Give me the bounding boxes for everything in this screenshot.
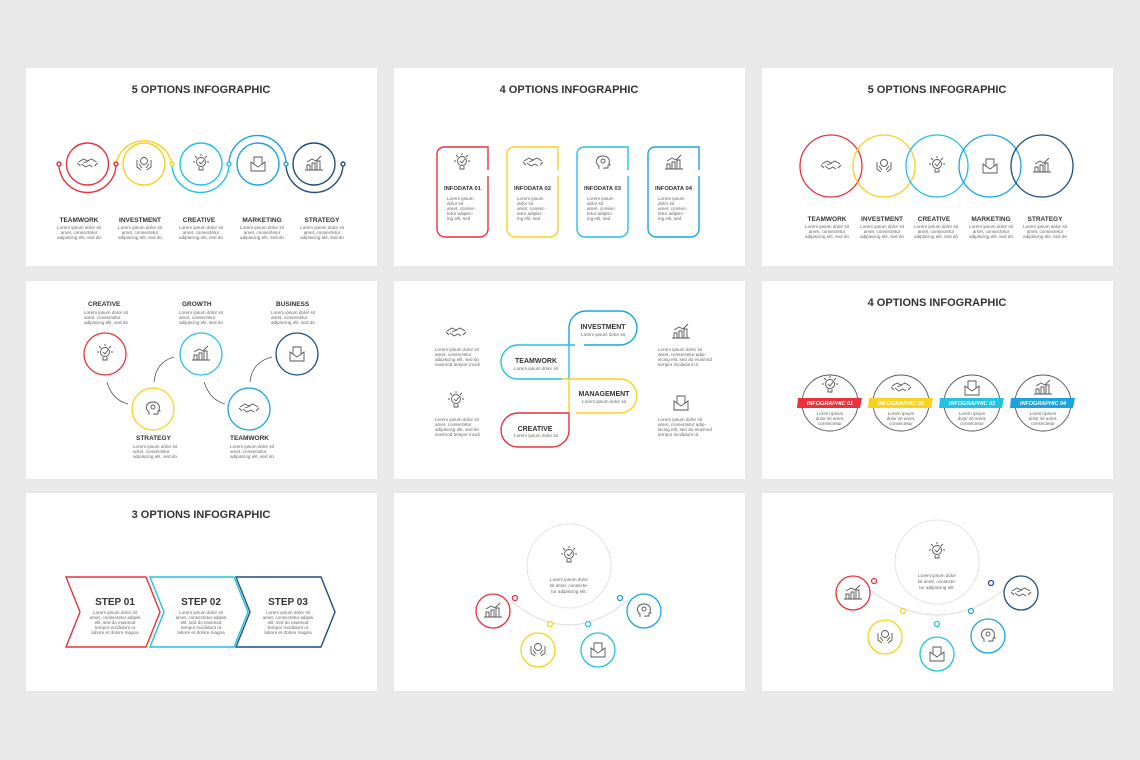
panel: snake pills: Lorem ipsum dolor sit — [435, 417, 480, 422]
panel: snake pills: iscing elit, sed do eiusmod — [658, 357, 712, 362]
labels: Lorem ipsum dolor sit — [240, 225, 285, 230]
panel: 5 options overlapping circles: amet, consectetur — [809, 229, 846, 234]
panel: 4 options banners: Lorem ipsum — [959, 411, 985, 416]
panel: snake pills: Lorem ipsum dolor sit — [514, 433, 559, 438]
panel: 5 options overlapping circles: adipiscing elit, sed do — [860, 234, 904, 239]
panel: 3 step chevrons: Lorem ipsum dolor sit — [266, 610, 311, 615]
panel: 4 options tabs: tetur adipisc- — [658, 211, 685, 216]
panel: 4 options tabs: ing elit, sed — [587, 216, 611, 221]
panel: 4 options tabs: tetur adipisc- — [517, 211, 544, 216]
panel: hub with 4 bubbles: tur adipiscing elit. — [551, 589, 587, 594]
panel: 5 options overlapping circles: amet, consectetur — [973, 229, 1010, 234]
panel: 4 options tabs: ing elit, sed — [658, 216, 682, 221]
labels: STRATEGY — [305, 217, 340, 224]
panel: snake pills: Lorem ipsum dolor sit — [582, 399, 627, 404]
panel: 5 options overlapping circles — [762, 68, 1113, 266]
panel: snake pills: eiusmod tempor incidi — [435, 362, 480, 367]
panel: hub with 5 bubbles: Lorem ipsum dolor — [918, 573, 956, 578]
panel: hub with 5 bubbles: sit amet, consecte- — [918, 579, 957, 584]
panel: 4 options banners: Lorem ipsum — [888, 411, 914, 416]
panel: snake pills: iscing elit, sed do eiusmod — [658, 427, 712, 432]
panel: snake pills: amet, consectetur — [435, 352, 472, 357]
labels: adipiscing elit, sed do — [179, 235, 223, 240]
panel: snake pills: amet, consectetur adip- — [658, 422, 706, 427]
title: 4 OPTIONS INFOGRAPHIC — [500, 84, 638, 96]
panel: 4 options tabs: dolor sit — [587, 201, 604, 206]
panel: zigzag circles: adipiscing elit, sed do — [271, 320, 315, 325]
panel: 4 options tabs: Lorem ipsum — [517, 196, 544, 201]
panel: zigzag circles: GROWTH — [182, 301, 212, 308]
tabs — [437, 147, 699, 237]
panel: zigzag circles: TEAMWORK — [230, 435, 269, 442]
panel: zigzag circles: BUSINESS — [276, 301, 310, 308]
panel: zigzag circles: amet, consectetur — [230, 449, 267, 454]
panel: 3 step chevrons: labore et dolore magna — [177, 630, 225, 635]
panel: 4 options banners: Lorem ipsum — [817, 411, 843, 416]
labels: Lorem ipsum dolor sit — [300, 225, 345, 230]
panel: zigzag circles — [26, 281, 377, 479]
panel: 5 options overlapping circles: Lorem ipsum dolor sit — [860, 224, 905, 229]
panel: zigzag circles: adipiscing elit, sed do — [230, 454, 274, 459]
panel: hub with 4 bubbles — [394, 493, 745, 691]
panel: snake pills: eiusmod tempor incidi — [435, 432, 480, 437]
panel: 4 options tabs: Lorem ipsum — [658, 196, 685, 201]
labels: Lorem ipsum dolor sit — [57, 225, 102, 230]
panel: 3 step chevrons: elit, sed do eiusmod — [268, 620, 309, 625]
panel: 5 options overlapping circles: adipiscing elit, sed do — [969, 234, 1013, 239]
panel: 4 options tabs: Lorem ipsum — [587, 196, 614, 201]
panel: zigzag circles: amet, consectetur — [84, 315, 121, 320]
panel: zigzag circles: amet, consectetur — [271, 315, 308, 320]
panel: snake pills: Lorem ipsum dolor sit — [581, 332, 626, 337]
panel: 3 step chevrons: labore et dolore magna — [91, 630, 139, 635]
panel: 4 options banners: Lorem ipsum — [1030, 411, 1056, 416]
panel: 3 step chevrons: STEP 03 — [268, 597, 308, 608]
labels: amet, consectetur — [244, 230, 281, 235]
panel: 3 step chevrons: STEP 02 — [181, 597, 221, 608]
panel: 3 step chevrons: elit, sed do eiusmod — [181, 620, 222, 625]
labels: adipiscing elit, sed do — [300, 235, 344, 240]
panel: 3 step chevrons: tempor incididunt ut — [268, 625, 309, 630]
chain of circles — [57, 136, 345, 192]
labels — [57, 217, 345, 240]
title: 5 OPTIONS INFOGRAPHIC — [868, 84, 1006, 96]
panel: 5 options overlapping circles: adipiscing elit, sed do — [805, 234, 849, 239]
title: 5 OPTIONS INFOGRAPHIC — [132, 84, 270, 96]
panel: zigzag circles: Lorem ipsum dolor sit — [84, 310, 129, 315]
panel: 4 options tabs: INFODATA 03 — [584, 186, 622, 192]
panel: 4 options banners: consectetur — [960, 421, 984, 426]
panel: snake pills: TEAMWORK — [515, 358, 557, 365]
labels: adipiscing elit, sed do — [118, 235, 162, 240]
labels: adipiscing elit, sed do — [57, 235, 101, 240]
panel: zigzag circles: Lorem ipsum dolor sit — [271, 310, 316, 315]
panel: zigzag circles: STRATEGY — [136, 435, 172, 442]
panel: zigzag circles: adipiscing elit, sed do — [133, 454, 177, 459]
panel: 4 options tabs: INFODATA 04 — [655, 186, 693, 192]
panel: 4 options banners: INFOGRAPHIC 03 — [949, 401, 995, 407]
panel: snake pills: tempor incididunt ut — [658, 362, 699, 367]
panel: 4 options tabs: dolor sit — [517, 201, 534, 206]
panel: 4 options tabs: INFODATA 02 — [514, 186, 551, 192]
panel: snake pills: Lorem ipsum dolor sit — [658, 417, 703, 422]
panel: 4 options tabs: dolor sit — [658, 201, 675, 206]
panel: 4 options tabs: amet, consec- — [658, 206, 687, 211]
title: 4 OPTIONS INFOGRAPHIC — [868, 297, 1006, 309]
labels: amet, consectetur — [61, 230, 98, 235]
panel: snake pills: MANAGEMENT — [579, 391, 630, 398]
panel: 4 options banners: dolor sit amet, — [887, 416, 915, 421]
panel: 4 options tabs: INFODATA 01 — [444, 186, 482, 192]
panel: 4 options banners: consectetur — [1031, 421, 1055, 426]
labels: TEAMWORK — [60, 217, 99, 224]
panel: 3 step chevrons: tempor incididunt ut — [181, 625, 222, 630]
panel: 4 options banners — [762, 281, 1113, 479]
panel: zigzag circles: Lorem ipsum dolor sit — [230, 444, 275, 449]
panel: zigzag circles: adipiscing elit, sed do — [84, 320, 128, 325]
panel: 4 options tabs: tetur adipisc- — [587, 211, 614, 216]
panel: 5 options overlapping circles: adipiscing elit, sed do — [1023, 234, 1067, 239]
panel: 3 step chevrons: labore et dolore magna — [264, 630, 312, 635]
panel: 5 options overlapping circles: TEAMWORK — [808, 216, 847, 223]
panel: snake pills: Lorem ipsum dolor sit — [514, 366, 559, 371]
panel: 5 options overlapping circles: Lorem ipsum dolor sit — [1023, 224, 1068, 229]
panel: 4 options tabs: ing elit, sed — [447, 216, 471, 221]
panel: 4 options tabs: amet, consec- — [587, 206, 616, 211]
panel: 4 options banners: INFOGRAPHIC 04 — [1020, 401, 1066, 407]
panel: snake pills: INVESTMENT — [580, 324, 626, 331]
panel: 4 options banners: consectetur — [889, 421, 913, 426]
panel: 3 step chevrons: Lorem ipsum dolor sit — [93, 610, 138, 615]
panel: 4 options tabs: dolor sit — [447, 201, 464, 206]
panel: 3 step chevrons: tempor incididunt ut — [95, 625, 136, 630]
panel: hub with 4 bubbles: Lorem ipsum dolor — [550, 577, 588, 582]
labels: amet, consectetur — [304, 230, 341, 235]
panel: 4 options banners: consectetur — [818, 421, 842, 426]
panel: 4 options tabs: amet, consec- — [517, 206, 546, 211]
labels: amet, consectetur — [183, 230, 220, 235]
labels: CREATIVE — [183, 217, 216, 224]
panel: zigzag circles: Lorem ipsum dolor sit — [179, 310, 224, 315]
panel: 4 options tabs: amet, consec- — [447, 206, 476, 211]
panel: 5 options overlapping circles: amet, consectetur — [864, 229, 901, 234]
panel: snake pills: CREATIVE — [518, 426, 553, 433]
labels: MARKETING — [242, 217, 282, 224]
panel: hub with 5 bubbles — [762, 493, 1113, 691]
panel: 5 options overlapping circles: Lorem ipsum dolor sit — [914, 224, 959, 229]
panel: 3 step chevrons: Lorem ipsum dolor sit — [179, 610, 224, 615]
labels: adipiscing elit, sed do — [240, 235, 284, 240]
panel: 3 step chevrons: amet, consectetur adipisi — [90, 615, 140, 620]
title: 3 OPTIONS INFOGRAPHIC — [132, 509, 270, 521]
panel: 5 options overlapping circles: CREATIVE — [918, 216, 951, 223]
panel: 3 step chevrons: amet, consectetur adipisi — [263, 615, 313, 620]
panel: zigzag circles: adipiscing elit, sed do — [179, 320, 223, 325]
panel: 5 options overlapping circles: STRATEGY — [1028, 216, 1063, 223]
panel: 5 options overlapping circles: amet, consectetur — [918, 229, 955, 234]
panel: 5 options overlapping circles: INVESTMENT — [861, 216, 903, 223]
panel: 5 options overlapping circles: adipiscing elit, sed do — [914, 234, 958, 239]
labels: Lorem ipsum dolor sit — [118, 225, 163, 230]
panel: 3 step chevrons: amet, consectetur adipisi — [176, 615, 226, 620]
panel: 3 step chevrons: elit, sed do eiusmod — [95, 620, 136, 625]
panel: 4 options tabs: Lorem ipsum — [447, 196, 474, 201]
panel: zigzag circles: CREATIVE — [88, 301, 121, 308]
panel: snake pills: Lorem ipsum dolor sit — [658, 347, 703, 352]
panel: hub with 5 bubbles: tur adipiscing elit. — [919, 585, 955, 590]
panel: hub with 4 bubbles: sit amet, consecte- — [550, 583, 589, 588]
panel: zigzag circles: Lorem ipsum dolor sit — [133, 444, 178, 449]
panel: 4 options banners: INFOGRAPHIC 01 — [807, 401, 853, 407]
panel: snake pills — [394, 281, 745, 479]
panel: 5 options overlapping circles: Lorem ipsum dolor sit — [969, 224, 1014, 229]
panel: snake pills: tempor incididunt ut — [658, 432, 699, 437]
panel: 5 options overlapping circles: MARKETING — [971, 216, 1011, 223]
panel: 4 options banners: INFOGRAPHIC 02 — [878, 401, 924, 407]
panel: snake pills: adipiscing elit, sed do — [435, 427, 479, 432]
panel: 4 options banners: dolor sit amet, — [958, 416, 986, 421]
labels: amet, consectetur — [122, 230, 159, 235]
panel: 5 options overlapping circles: Lorem ipsum dolor sit — [805, 224, 850, 229]
panel: 4 options banners: dolor sit amet, — [1029, 416, 1057, 421]
panel: 3 step chevrons: STEP 01 — [95, 597, 135, 608]
labels: INVESTMENT — [119, 217, 161, 224]
panel: snake pills: adipiscing elit, sed do — [435, 357, 479, 362]
panel: zigzag circles: amet, consectetur — [133, 449, 170, 454]
panel: 4 options tabs: tetur adipisc- — [447, 211, 474, 216]
panel: 4 options tabs: ing elit, sed — [517, 216, 541, 221]
panel: snake pills: amet, consectetur adip- — [658, 352, 706, 357]
panel: 3 step chevrons — [26, 493, 377, 691]
panel: snake pills: amet, consectetur — [435, 422, 472, 427]
panel: 4 options tabs — [394, 68, 745, 266]
panel: zigzag circles: amet, consectetur — [179, 315, 216, 320]
panel: snake pills: Lorem ipsum dolor sit — [435, 347, 480, 352]
panel: 5 options circles — [26, 68, 377, 266]
panel: 5 options overlapping circles: amet, consectetur — [1027, 229, 1064, 234]
labels: Lorem ipsum dolor sit — [179, 225, 224, 230]
panel: 4 options banners: dolor sit amet, — [816, 416, 844, 421]
